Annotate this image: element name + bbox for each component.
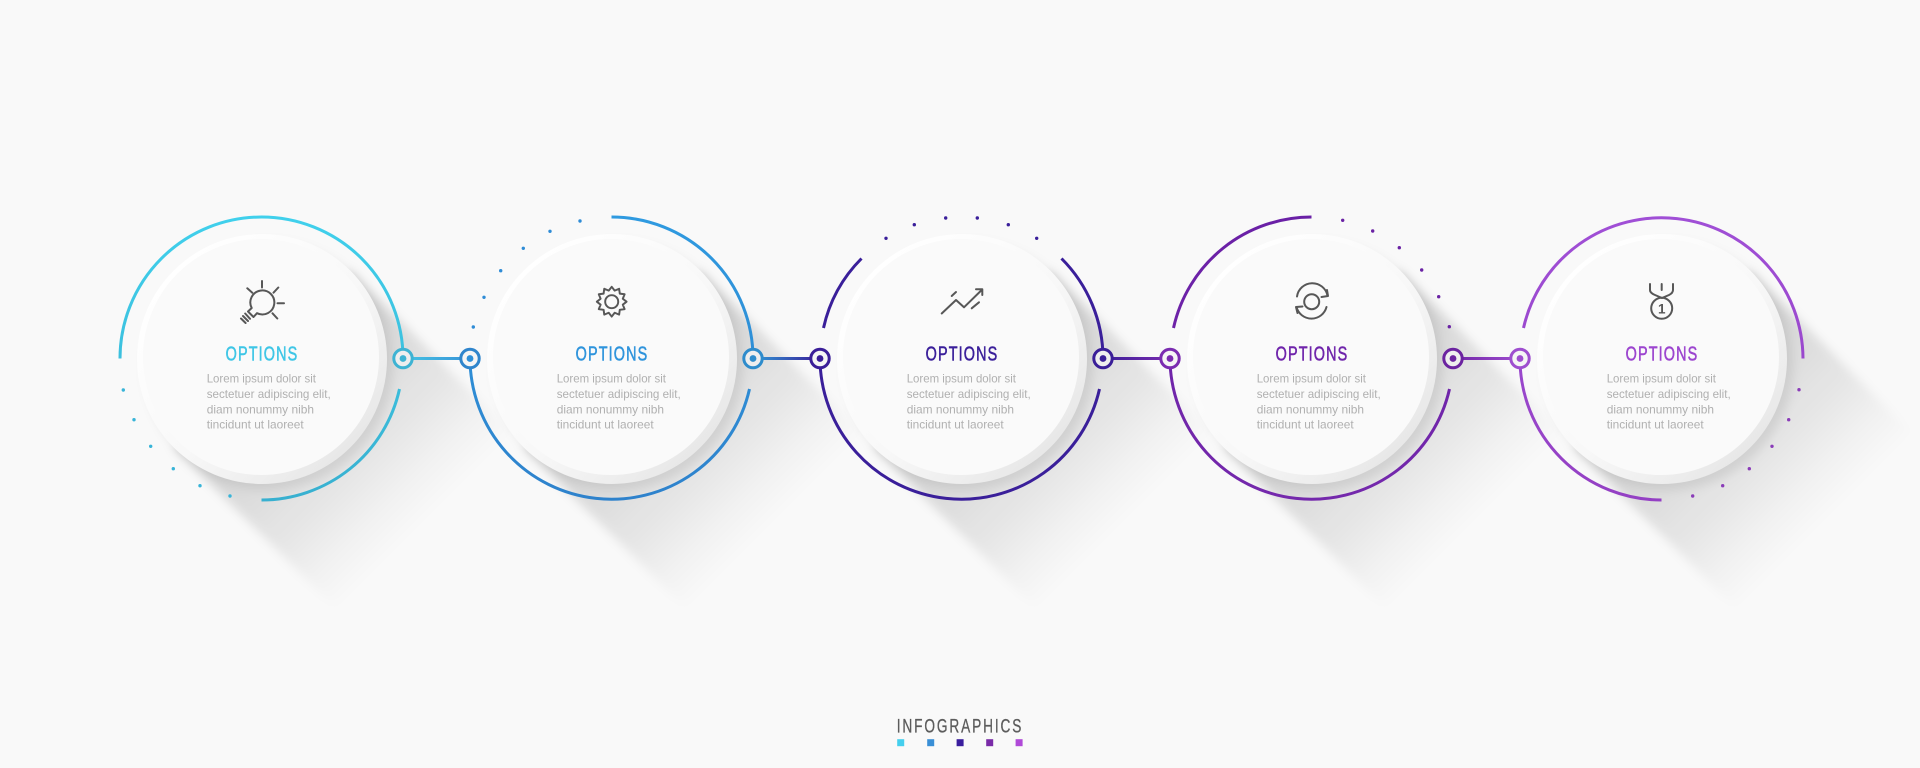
heading: OPTIONS xyxy=(1626,342,1698,365)
icon: rising chart arrow xyxy=(942,289,982,314)
text block xyxy=(207,372,331,432)
text block: diam nonummy nibh xyxy=(207,402,314,416)
heading: OPTIONS xyxy=(226,342,298,365)
text block: sectetuer adipiscing elit, xyxy=(1607,387,1731,401)
long shadow xyxy=(495,242,863,610)
connector 2 to 3 xyxy=(744,349,829,368)
text block: Lorem ipsum dolor sit xyxy=(1257,372,1367,386)
heading: OPTIONS xyxy=(576,342,648,365)
text block xyxy=(1607,372,1731,432)
icon: light bulb xyxy=(241,281,284,323)
text block: sectetuer adipiscing elit, xyxy=(557,387,681,401)
text block: diam nonummy nibh xyxy=(907,402,1014,416)
text block xyxy=(907,372,1031,432)
ring arcs xyxy=(820,258,1103,499)
connector 3 to 4 xyxy=(1094,349,1179,368)
icon: medal: 1 xyxy=(1658,302,1666,316)
long shadow xyxy=(845,242,1213,610)
text block: sectetuer adipiscing elit, xyxy=(1257,387,1381,401)
ring arcs xyxy=(1520,218,1803,500)
text block xyxy=(1257,372,1381,432)
text block: Lorem ipsum dolor sit xyxy=(557,372,667,386)
panel: step 3 xyxy=(820,216,1213,610)
ring arcs xyxy=(120,217,403,500)
heading: OPTIONS xyxy=(1276,342,1348,365)
panel: step 1 xyxy=(120,217,513,610)
disc xyxy=(837,234,1087,484)
panel: step 4 xyxy=(1170,217,1563,610)
dotted arc xyxy=(1691,388,1801,498)
text block: tincidunt ut laoreet xyxy=(207,418,304,432)
heading: OPTIONS xyxy=(926,342,998,365)
panel: step 5 xyxy=(1520,218,1913,610)
text block: sectetuer adipiscing elit, xyxy=(907,387,1031,401)
disc xyxy=(487,234,737,484)
text block: sectetuer adipiscing elit, xyxy=(207,387,331,401)
text block: Lorem ipsum dolor sit xyxy=(907,372,1017,386)
text block: Lorem ipsum dolor sit xyxy=(207,372,317,386)
text block: tincidunt ut laoreet xyxy=(1607,418,1704,432)
ring arcs xyxy=(1170,217,1450,499)
icon: medal xyxy=(1650,284,1673,319)
disc xyxy=(1187,234,1437,484)
dotted arc xyxy=(884,216,1038,240)
text block: diam nonummy nibh xyxy=(557,402,664,416)
long shadow xyxy=(145,242,513,610)
panel: step 2 xyxy=(470,217,863,610)
ring arcs xyxy=(470,217,753,499)
long shadow xyxy=(1545,242,1913,610)
footer legend squares xyxy=(897,739,1023,746)
dotted arc xyxy=(122,388,232,498)
connector 1 to 2 xyxy=(394,349,479,368)
text block xyxy=(557,372,681,432)
text block: tincidunt ut laoreet xyxy=(907,418,1004,432)
dotted arc xyxy=(1341,219,1451,328)
icon: cycle arrows xyxy=(1296,283,1328,319)
footer title: INFOGRAPHICS xyxy=(897,715,1023,737)
connector 4 to 5 xyxy=(1444,349,1529,368)
disc xyxy=(137,234,387,484)
disc xyxy=(1537,234,1787,484)
text block: Lorem ipsum dolor sit xyxy=(1607,372,1717,386)
dotted arc xyxy=(472,219,582,329)
icon: gear xyxy=(597,287,627,317)
text block: tincidunt ut laoreet xyxy=(557,418,654,432)
text block: diam nonummy nibh xyxy=(1257,402,1364,416)
long shadow xyxy=(1195,242,1563,610)
text block: diam nonummy nibh xyxy=(1607,402,1714,416)
text block: tincidunt ut laoreet xyxy=(1257,418,1354,432)
